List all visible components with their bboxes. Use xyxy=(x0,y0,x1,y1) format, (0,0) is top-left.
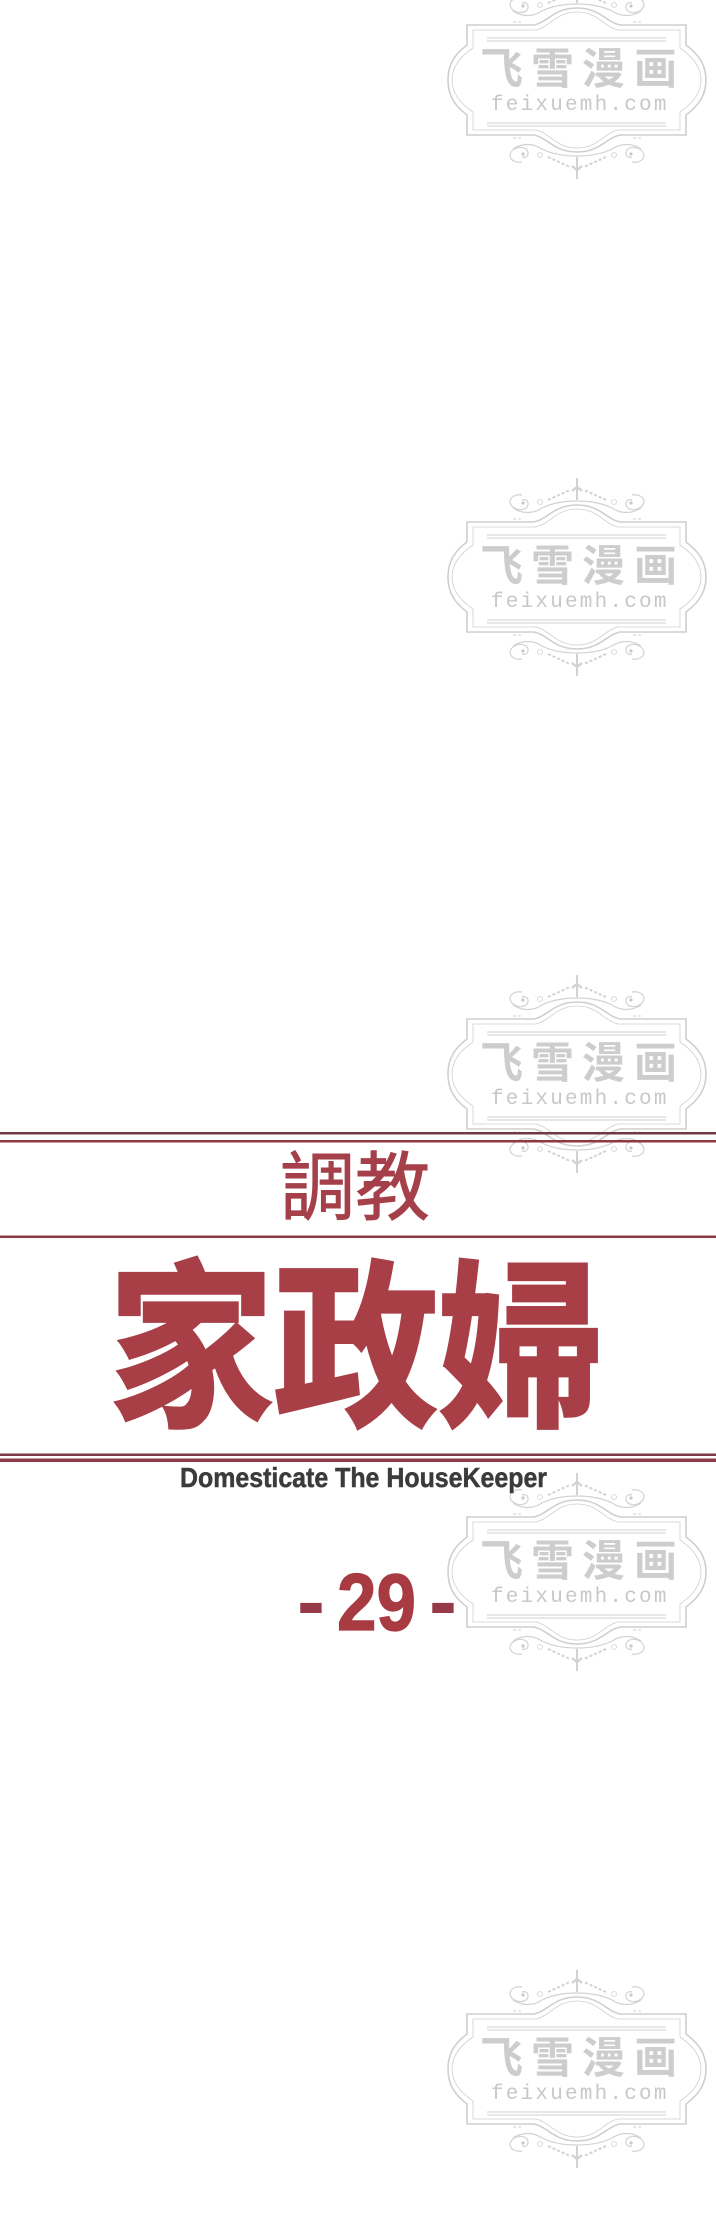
watermark chinese name: 飞雪漫画 xyxy=(480,543,677,591)
bottom double rule xyxy=(0,1454,716,1462)
watermark 2 xyxy=(448,478,706,676)
episode number xyxy=(297,1554,457,1648)
watermark frame xyxy=(448,1473,706,1671)
watermark url: feixuemh.com xyxy=(491,591,669,614)
watermark 4 xyxy=(448,1473,706,1671)
watermark url: feixuemh.com xyxy=(491,94,669,117)
watermark chinese name: 飞雪漫画 xyxy=(480,2035,677,2083)
english subtitle: Domesticate The HouseKeeper xyxy=(180,1462,547,1493)
title block xyxy=(0,1132,716,1648)
watermark frame xyxy=(448,975,706,1173)
watermark chinese name: 飞雪漫画 xyxy=(480,46,677,94)
episode number: - xyxy=(429,1554,457,1648)
watermark url: feixuemh.com xyxy=(491,1088,669,1111)
top double rule xyxy=(0,1132,716,1142)
watermark frame xyxy=(448,1970,706,2168)
watermark url: feixuemh.com xyxy=(491,1586,669,1609)
middle rule xyxy=(0,1236,716,1238)
watermark frame xyxy=(448,478,706,676)
watermark url: feixuemh.com xyxy=(491,2083,669,2106)
watermark chinese name: 飞雪漫画 xyxy=(480,1040,677,1088)
subtitle: 調教 xyxy=(280,1146,430,1230)
watermark frame xyxy=(448,0,706,179)
watermark chinese name: 飞雪漫画 xyxy=(480,1538,677,1586)
episode number: - xyxy=(297,1554,325,1648)
watermark 1 xyxy=(448,0,706,179)
episode number: 29 xyxy=(337,1558,416,1648)
watermark 5 xyxy=(448,1970,706,2168)
main title: 家政婦 xyxy=(109,1249,603,1451)
watermark 3 xyxy=(448,975,706,1173)
